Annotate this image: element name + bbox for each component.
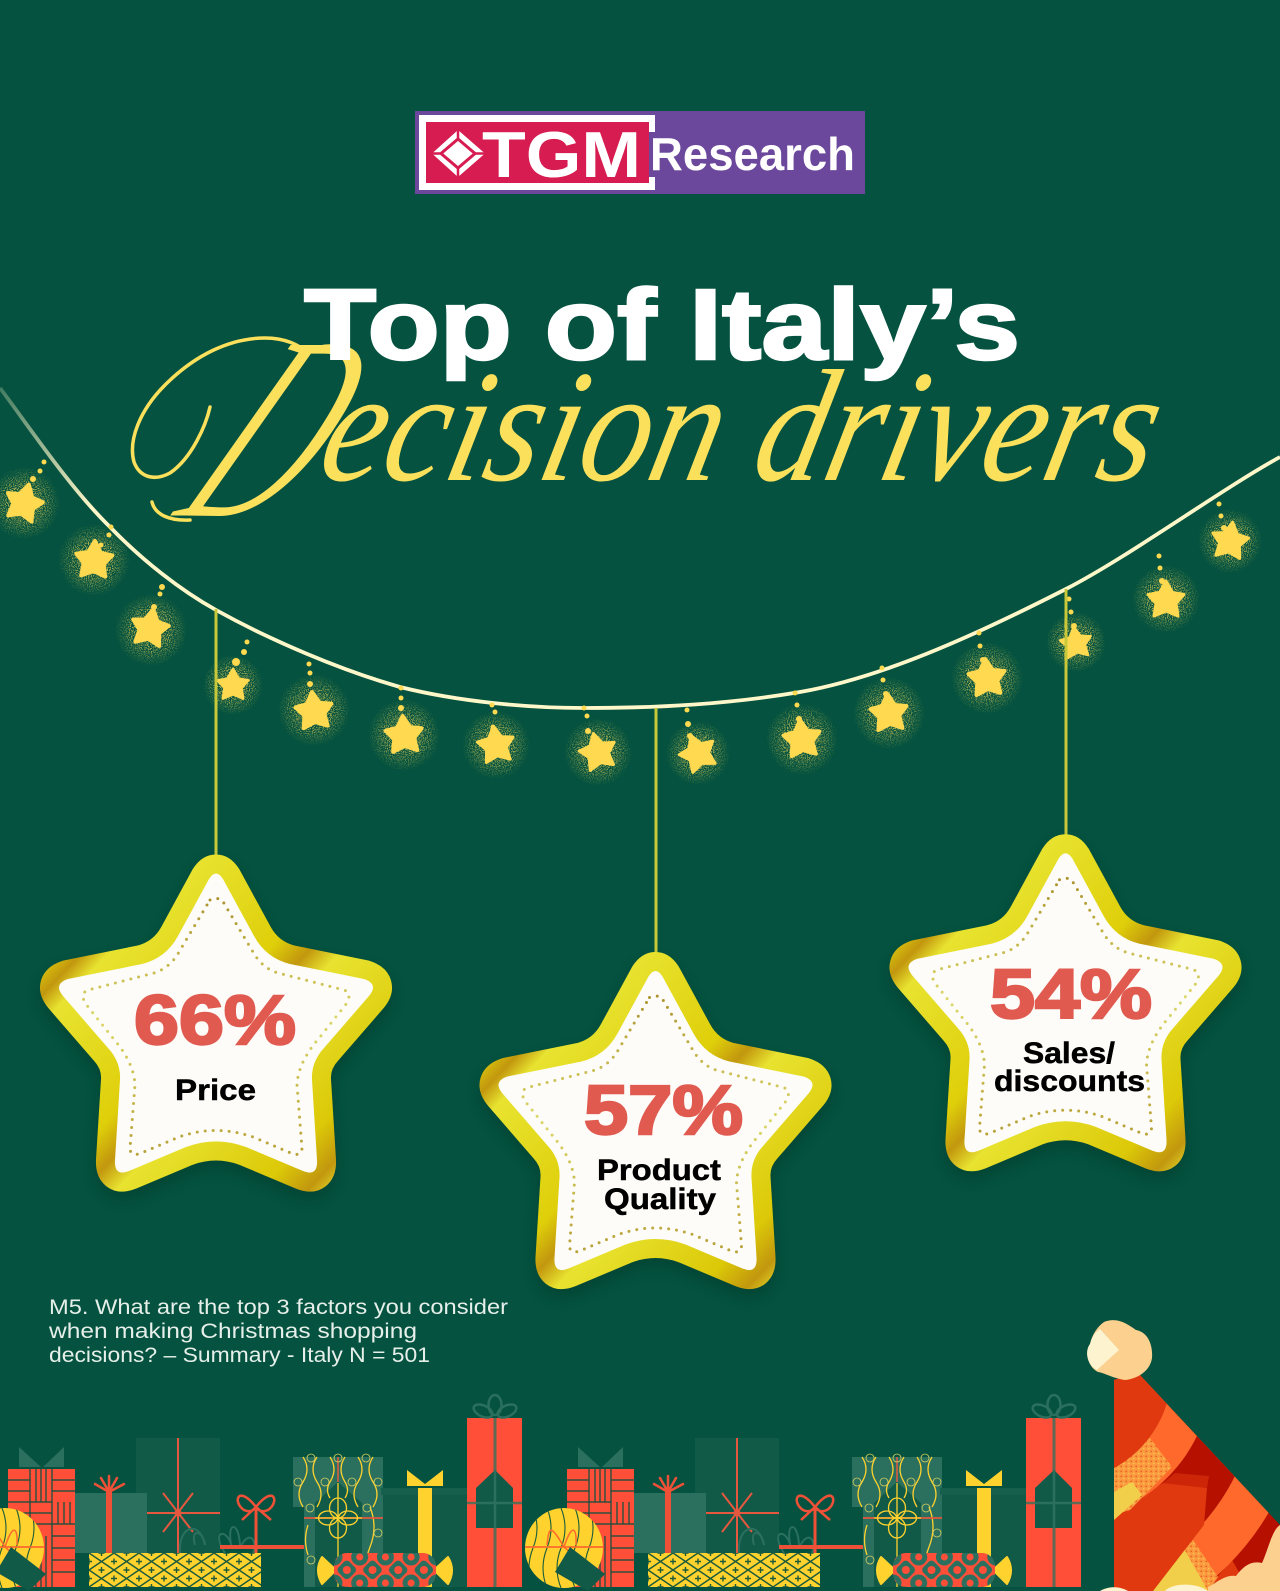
survey question note: when making Christmas shopping	[48, 1320, 417, 1343]
hat fluff trim	[1208, 1525, 1280, 1591]
gift: dark green box with yellow ribbon	[381, 1470, 469, 1587]
light star 1	[0, 460, 60, 539]
gift boxes row	[0, 1395, 522, 1591]
hat pompom	[1087, 1320, 1152, 1380]
gift boxes row repeated	[525, 1395, 1081, 1591]
hat fluff highlights	[1100, 1585, 1208, 1591]
string lights	[0, 460, 1262, 786]
ornament: 66% Price: 66%	[134, 981, 296, 1059]
light star 9	[666, 708, 730, 785]
ornament: 57% Product Quality: 57%	[584, 1071, 743, 1149]
light star 11	[853, 666, 925, 749]
light star 6	[368, 686, 440, 771]
light star 4	[203, 640, 263, 715]
ornament: 57% Product Quality: Quality	[604, 1183, 716, 1216]
light star 10	[766, 690, 838, 775]
ornament: 54% Sales/discounts: 54%	[990, 955, 1152, 1033]
gift: tall red box	[467, 1395, 522, 1587]
gift: teal box with red ribbon	[75, 1476, 147, 1553]
light star 3	[115, 584, 187, 666]
title: Decision drivers	[132, 282, 1180, 575]
ornament: 54% Sales/discounts	[908, 589, 1222, 1160]
survey question note	[48, 1296, 508, 1367]
gift: patterned wave box	[293, 1454, 383, 1587]
light star 5	[278, 662, 350, 746]
gift: yellow lattice box	[89, 1553, 261, 1587]
ornament: 57% Product Quality: Product	[597, 1154, 721, 1187]
light star 2	[58, 524, 130, 596]
garland cord	[0, 388, 1280, 708]
ornament: 66% Price: Price	[175, 1074, 256, 1107]
gift: red brick box	[8, 1447, 75, 1587]
title: Decision drivers: ecision drivers	[307, 339, 1180, 516]
ornament: 54% Sales/discounts: Sales/	[1023, 1037, 1116, 1070]
light star 14	[1132, 554, 1200, 633]
party hat	[1087, 1320, 1280, 1591]
survey question note: decisions? – Summary - Italy N = 501	[49, 1344, 430, 1367]
gift: wrapped candy	[318, 1553, 452, 1587]
gift: curled teal ribbon	[180, 1527, 254, 1553]
logo: TGM Research: Research	[650, 128, 855, 180]
survey question note: M5. What are the top 3 factors you consider	[49, 1296, 508, 1319]
ornament: 66% Price	[59, 609, 373, 1181]
light star 12	[951, 630, 1023, 714]
light star 13	[1046, 596, 1106, 672]
gift: red ribbon bow	[220, 1496, 305, 1553]
light star 7	[462, 702, 530, 779]
ornament: 57% Product Quality	[498, 708, 812, 1278]
logo: TGM Research: TGM	[482, 118, 641, 191]
title: Decision drivers: D	[133, 282, 426, 575]
light star 15	[1198, 502, 1262, 573]
gift: tall dark green box	[136, 1438, 220, 1553]
logo: TGM Research	[415, 111, 865, 194]
gift: yellow round ornament with tag	[0, 1508, 46, 1591]
light star 8	[564, 706, 632, 786]
title: Top of Italy's: Top of Italy’s	[304, 269, 1020, 381]
ornament: 54% Sales/discounts: discounts	[994, 1065, 1145, 1098]
